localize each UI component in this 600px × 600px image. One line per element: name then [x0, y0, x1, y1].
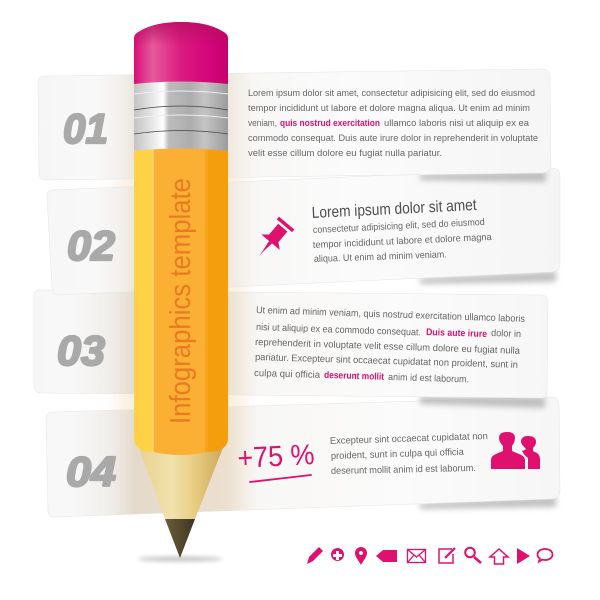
panel: 04: [46, 397, 560, 517]
panel: 03: [34, 290, 548, 408]
text block 01: quis nostrud exercitation: [280, 118, 380, 129]
text block 03: dolor in: [491, 328, 521, 340]
text block 04: proident, sunt in culpa qui officia: [331, 447, 465, 462]
pencil wood tip: [136, 440, 226, 519]
text block 03: Duis aute irure: [426, 327, 487, 340]
pencil eraser: [134, 22, 228, 84]
text block 03: reprehenderit in voluptate velit esse cillum dolore eu fugiat nulla: [255, 337, 521, 357]
pencil: [134, 22, 228, 558]
panel: 01: [38, 69, 551, 182]
text block 04: [330, 431, 488, 477]
text block 01: velit esse cillum dolore eu fugiat nulla pariatur.: [248, 148, 442, 159]
icon: envelope: [408, 550, 426, 562]
text block 04: deserunt mollit anim id est laborum.: [331, 463, 476, 477]
text block 01: [248, 88, 538, 159]
text block 04: Excepteur sint occaecat cupidatat non: [330, 431, 488, 447]
icon: speech bubble: [538, 549, 552, 562]
text block 01: ullamco laboris nisi ut aliquip ex ea: [384, 118, 530, 129]
text block 01: commodo consequat. Duis aute irure dolor in reprehenderit in voluptate: [248, 133, 538, 144]
text block 03: anim id est laborum.: [388, 372, 469, 385]
text block 02: aliqua. Ut enim ad minim veniam.: [314, 249, 447, 265]
text block 03: culpa qui officia: [254, 368, 321, 381]
number 03: 03: [57, 327, 105, 374]
text block 01: Lorem ipsum dolor sit amet, consectetur adipisicing elit, sed do eiusmod: [248, 88, 535, 99]
icon: people: [491, 432, 540, 469]
pencil body: [134, 140, 228, 460]
icon: map pin: [355, 547, 367, 565]
icon: play: [517, 548, 530, 564]
pencil label: Infographics template: [165, 178, 197, 424]
icon row: [307, 547, 552, 565]
number 01: 01: [63, 105, 108, 152]
+75% stat: +75 %: [237, 439, 315, 475]
pencil lead: [165, 519, 195, 558]
underline: [250, 475, 311, 482]
text block 03: nisi ut aliquip ex ea commodo consequat.: [256, 322, 421, 338]
infographic canvas: [34, 22, 560, 565]
pencil metal ferrule: [134, 80, 228, 151]
icon: plus circle: [331, 548, 344, 561]
text block 01: veniam,: [248, 118, 277, 129]
icon: pencil: [307, 547, 323, 564]
panel: 02: [47, 168, 560, 295]
text block 03: [254, 305, 525, 385]
text block 02: consectetur adipisicing elit, sed do eiusmod: [313, 217, 485, 236]
text block 03: Ut enim ad minim veniam, quis nostrud exercitation ullamco laboris: [256, 305, 525, 325]
icon: edit: [439, 548, 455, 563]
icon: magnifier: [465, 548, 481, 563]
text block 03: pariatur. Excepteur sint occaecat cupidatat non proident, sunt in: [255, 352, 518, 371]
text block 02: tempor incididunt ut labore et dolore magna: [313, 232, 493, 251]
number 02: 02: [67, 222, 115, 269]
pencil glow on background: [118, 150, 244, 470]
text block 03: deserunt mollit: [324, 370, 385, 383]
heading 02: Lorem ipsum dolor sit amet: [311, 197, 477, 222]
icon: up arrow: [490, 549, 508, 564]
number 04: 04: [66, 448, 116, 495]
text block 02: [313, 217, 493, 265]
pencil shadow: [138, 556, 222, 562]
icon: tag: [376, 550, 397, 562]
icon: push pin: [250, 215, 296, 264]
text block 01: tempor incididunt ut labore et dolore magna aliqua. Ut enim ad minim: [248, 103, 530, 114]
